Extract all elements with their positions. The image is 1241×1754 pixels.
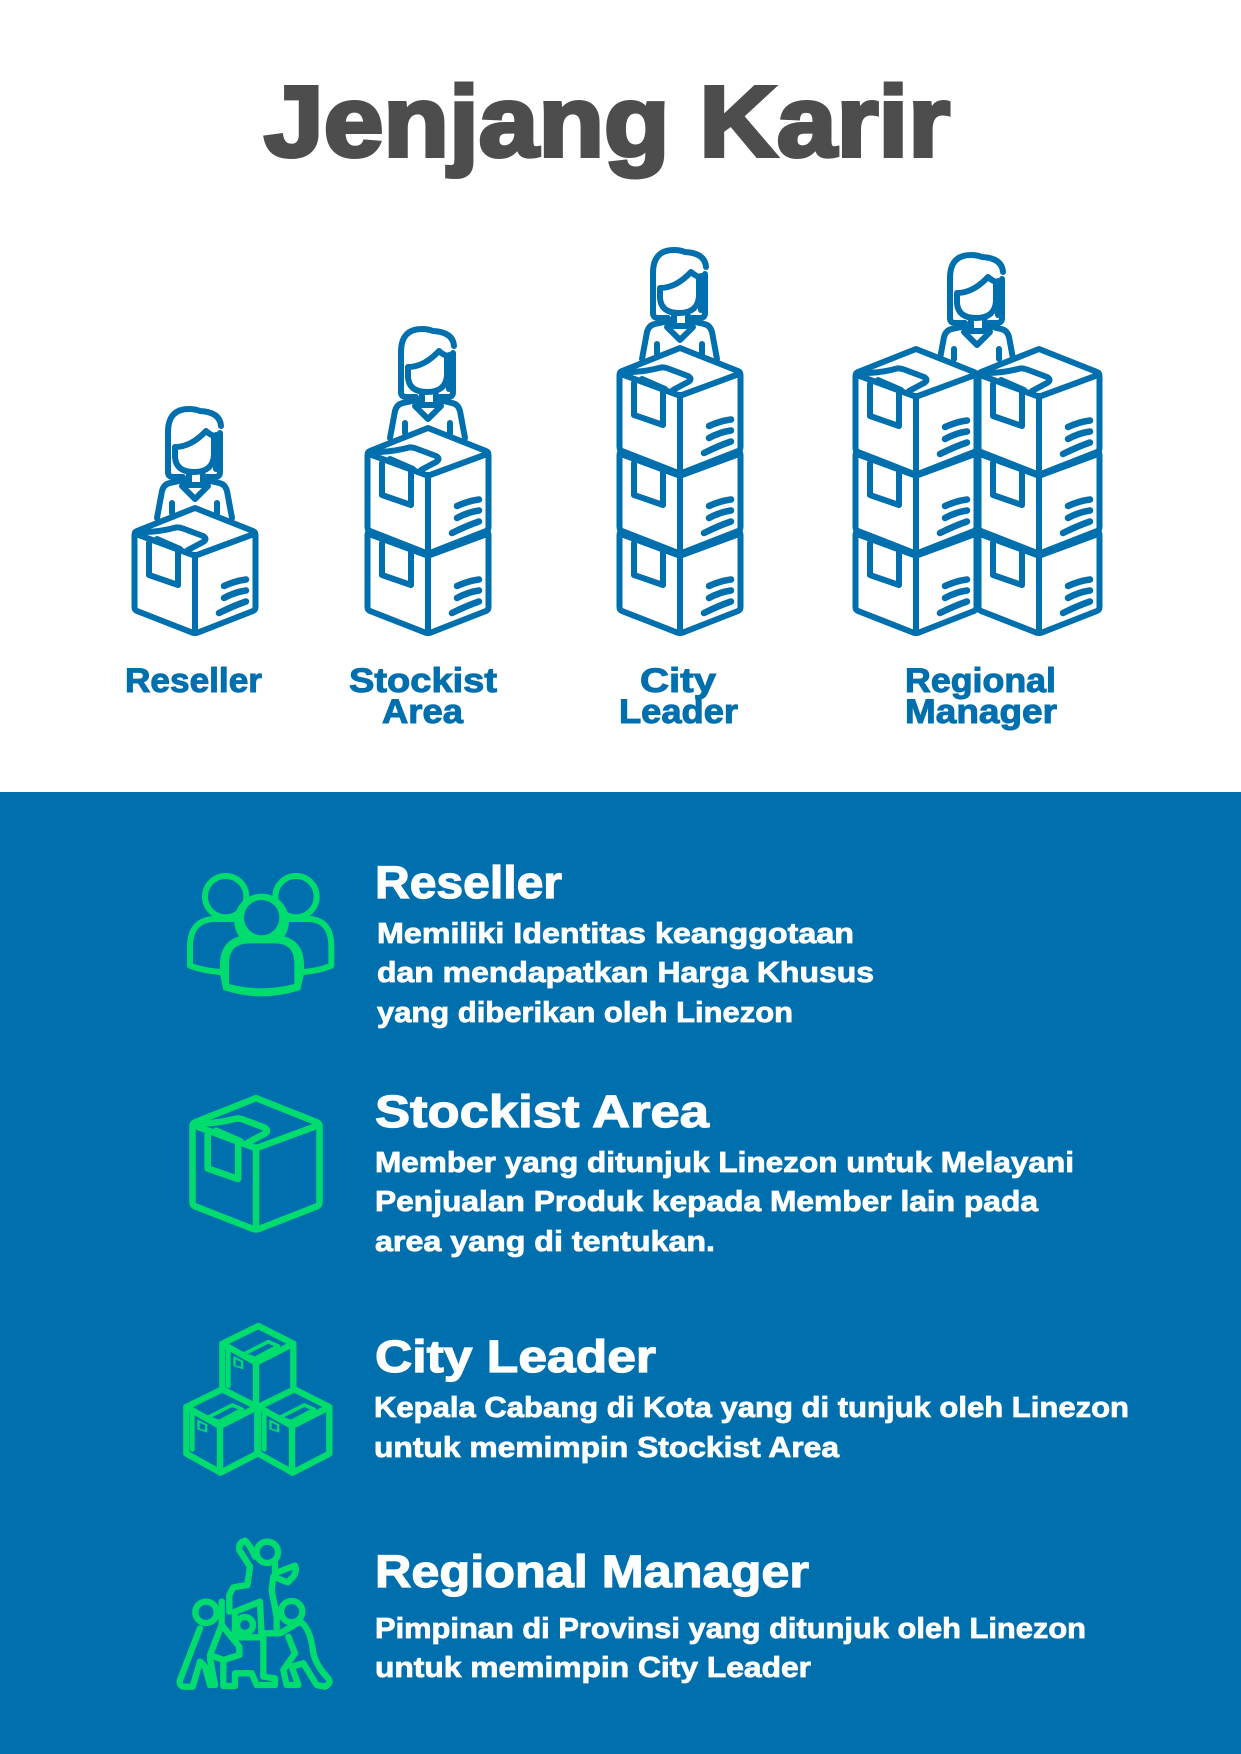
label: Stockist Area: Area xyxy=(382,693,464,731)
icon: three stacked boxes xyxy=(186,1326,329,1473)
text block: City Leader: Kepala Cabang di Kota yang di tunjuk oleh Linezon xyxy=(374,1392,1129,1424)
text block: Stockist Area: Stockist Area xyxy=(375,1086,710,1137)
icon: group of people xyxy=(190,876,331,996)
label: Regional Manager: Manager xyxy=(905,693,1057,731)
text block: Stockist Area xyxy=(375,1086,1074,1258)
label: City Leader xyxy=(619,662,738,731)
text block: Reseller: Reseller xyxy=(375,857,562,908)
label: City Leader: Leader xyxy=(619,693,738,731)
text block: City Leader xyxy=(374,1331,1129,1464)
label: Regional Manager xyxy=(905,662,1057,731)
label: Regional Manager: Regional xyxy=(905,662,1056,700)
text block: Regional Manager: Pimpinan di Provinsi yang ditunjuk oleh Linezon xyxy=(375,1613,1086,1645)
text block: Reseller: Memiliki Identitas keanggotaan xyxy=(377,918,854,950)
text block: Regional Manager: Regional Manager xyxy=(375,1546,809,1597)
text block: Regional Manager: untuk memimpin City Leader xyxy=(375,1652,811,1684)
panel: blue descriptions xyxy=(0,792,1241,1754)
figure: Reseller xyxy=(134,409,256,633)
text block: Reseller xyxy=(375,857,874,1029)
text block: Reseller: yang diberikan oleh Linezon xyxy=(377,997,793,1029)
text block: Stockist Area: Penjualan Produk kepada Member lain pada xyxy=(375,1186,1039,1218)
figure: City Leader xyxy=(620,250,740,633)
label: City Leader: City xyxy=(640,662,716,700)
figure: Stockist Area xyxy=(368,329,488,633)
label: Stockist Area: Stockist xyxy=(349,662,497,700)
text block: Reseller: dan mendapatkan Harga Khusus xyxy=(377,957,874,989)
label: Reseller: Reseller xyxy=(125,662,262,700)
icon: cardboard box xyxy=(192,1098,320,1229)
figure: Regional Manager xyxy=(856,255,1100,633)
text block: City Leader: City Leader xyxy=(375,1331,656,1382)
text block: Stockist Area: area yang di tentukan. xyxy=(375,1226,715,1258)
text block: Stockist Area: Member yang ditunjuk Linezon untuk Melayani xyxy=(375,1147,1074,1179)
icon: team climbing xyxy=(180,1541,329,1687)
title: Jenjang Karir xyxy=(264,66,950,178)
label: Stockist Area xyxy=(349,662,497,731)
text block: City Leader: untuk memimpin Stockist Area xyxy=(374,1432,840,1464)
text block: Regional Manager xyxy=(375,1546,1086,1684)
